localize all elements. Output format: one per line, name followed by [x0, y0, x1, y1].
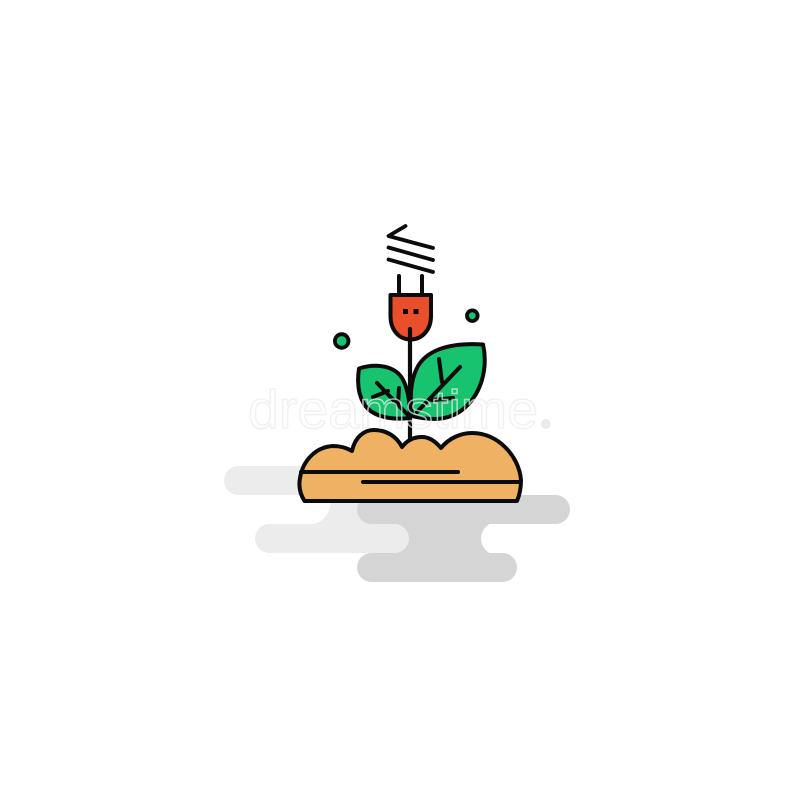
left leaf — [358, 366, 410, 419]
icon: lightning bolt — [388, 226, 433, 272]
stem — [408, 329, 412, 440]
left dot — [335, 334, 349, 348]
plug — [390, 276, 431, 340]
soil mound — [299, 430, 521, 501]
cloud: light grey background shapes — [224, 466, 370, 525]
cloud: light bar overlap — [255, 524, 409, 553]
cloud: dark grey background shapes — [357, 495, 570, 582]
watermark: dreamstime — [248, 380, 538, 440]
right leaf — [411, 344, 485, 419]
right dot — [467, 310, 478, 321]
